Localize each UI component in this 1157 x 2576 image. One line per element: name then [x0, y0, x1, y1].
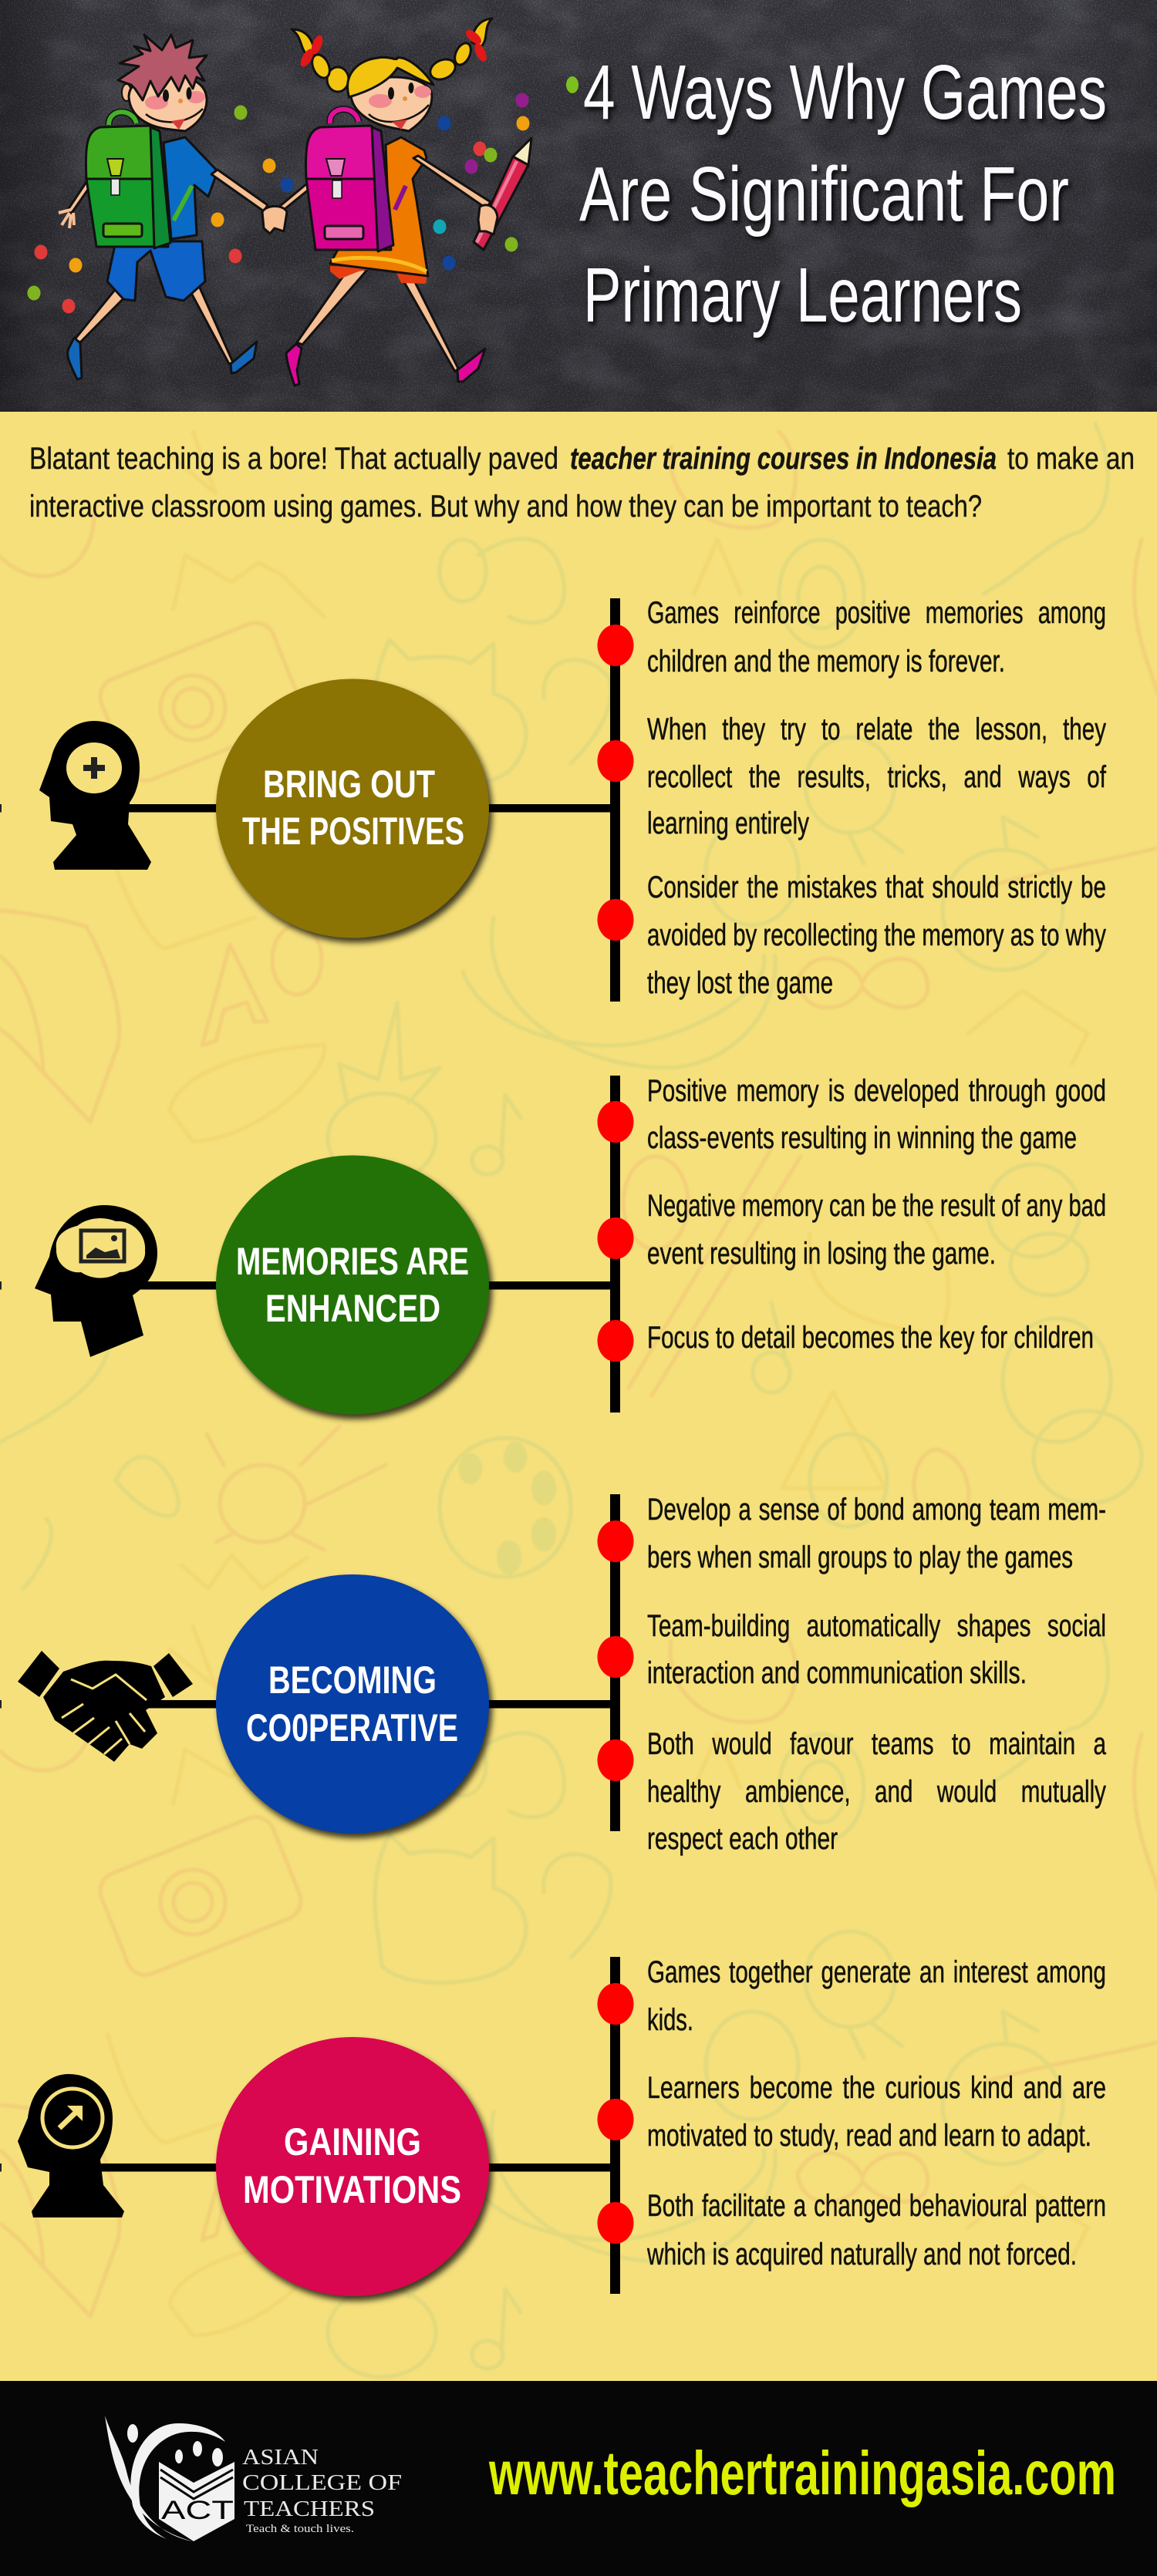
panel: memories are enhanced: [0, 1074, 1106, 1414]
logo: Asian College of Teachers: Teach & touch lives.: [246, 2523, 354, 2535]
confetti dots: [28, 93, 529, 313]
ellipse heading: becoming cooperative: BECOMING: [268, 1658, 437, 1702]
edge tick: [0, 1700, 2, 1709]
logo: Asian College of Teachers: ACT: [161, 2496, 234, 2525]
ellipse heading: gaining motivations: MOTIVATIONS: [243, 2168, 461, 2211]
header illustration: two children walking: [28, 19, 531, 386]
ellipse heading: memories are enhanced: [216, 1155, 489, 1414]
panel: bring out the positives: [0, 596, 1107, 1002]
boy: [59, 35, 268, 379]
logo: Asian College of Teachers: COLLEGE OF: [242, 2471, 402, 2495]
footer panel: [0, 2381, 1157, 2576]
panel: becoming cooperative: [0, 1493, 1107, 1856]
points text: [647, 1493, 1107, 1856]
ellipse heading: gaining motivations: [216, 2037, 489, 2296]
intro text: [29, 442, 1135, 524]
timeline bar: [610, 1494, 620, 1831]
ellipse heading: memories are enhanced: ENHANCED: [265, 1287, 440, 1330]
panel: gaining motivations: [0, 1955, 1106, 2296]
icon: head with plus: [39, 721, 151, 870]
edge tick: [0, 1281, 2, 1289]
logo: Asian College of Teachers: ASIAN: [242, 2446, 319, 2470]
intro text: teacher training courses in Indonesia: [570, 442, 997, 476]
timeline dots: [597, 1101, 634, 1362]
edge tick: [0, 804, 2, 813]
ellipse heading: becoming cooperative: [216, 1574, 489, 1834]
title: Primary Learners: [583, 252, 1022, 338]
ellipse heading: memories are enhanced: MEMORIES ARE: [236, 1240, 469, 1283]
logo: Asian College of Teachers: TEACHERS: [244, 2497, 375, 2521]
ellipse heading: bring out the positives: BRING OUT: [263, 763, 435, 806]
points text: they lost the game: [647, 966, 833, 1000]
timeline bar: [610, 1076, 620, 1413]
timeline dots: [597, 1983, 634, 2244]
title: [579, 49, 1107, 338]
timeline bar: [610, 1957, 620, 2294]
intro text: to make an: [1007, 442, 1135, 476]
points text: [646, 1955, 1106, 2271]
points text: learning entirely: [647, 806, 809, 840]
yellow background with doodles: [0, 412, 1157, 2382]
edge tick: [0, 2164, 2, 2171]
icon: head with picture in brain: [35, 1205, 157, 1357]
connector line: [147, 1700, 614, 1709]
points text: children and the memory is forever.: [647, 645, 1005, 679]
ellipse heading: bring out the positives: [216, 679, 489, 938]
intro text: Blatant teaching is a bore! That actually paved: [29, 442, 558, 476]
title dot: [566, 76, 578, 93]
icon: head with arrow: [18, 2074, 124, 2217]
timeline dots: [597, 1520, 634, 1781]
timeline bar: [610, 598, 620, 1002]
points text: [647, 596, 1107, 1000]
girl: [262, 19, 531, 386]
points text: interaction and communication skills.: [647, 1656, 1027, 1690]
ellipse heading: bring out the positives: THE POSITIVES: [242, 810, 464, 853]
icon: handshake: [18, 1651, 193, 1762]
chalkboard header panel: [0, 0, 1157, 412]
points text: event resulting in losing the game.: [647, 1237, 996, 1271]
logo: Asian College of Teachers: [105, 2416, 402, 2541]
points text: kids.: [647, 2003, 693, 2037]
points text: respect each other: [647, 1822, 838, 1856]
timeline dots: [597, 625, 634, 941]
connector line: [131, 1281, 614, 1289]
ellipse heading: gaining motivations: GAINING: [284, 2120, 421, 2164]
connector line: [123, 804, 614, 813]
connector line: [96, 2164, 614, 2171]
points text: [647, 1074, 1106, 1355]
ellipse heading: becoming cooperative: CO0PERATIVE: [246, 1706, 458, 1749]
